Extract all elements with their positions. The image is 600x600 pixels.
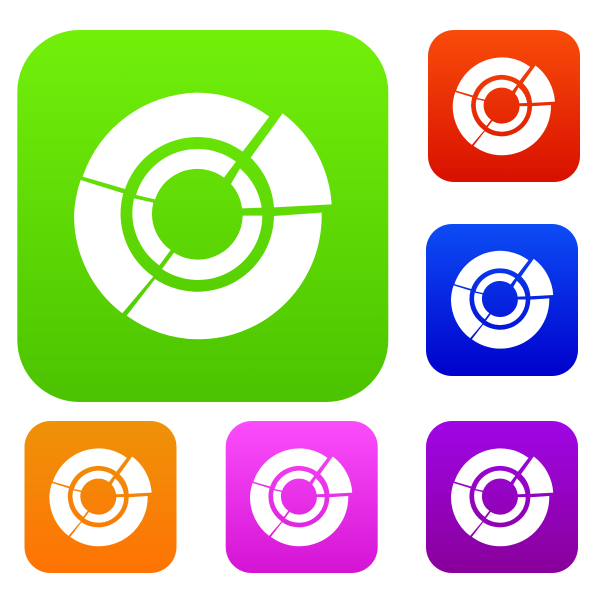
panel: orange icon bbox=[24, 421, 176, 573]
panel: purple icon bbox=[426, 421, 578, 573]
panel: red icon bbox=[428, 30, 580, 182]
panel: green main icon bbox=[17, 30, 388, 402]
panel: blue icon bbox=[426, 224, 578, 376]
panel: pink icon bbox=[226, 421, 378, 573]
